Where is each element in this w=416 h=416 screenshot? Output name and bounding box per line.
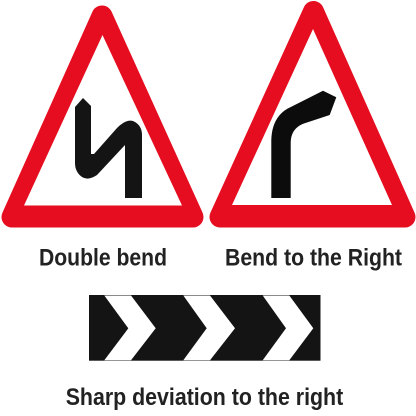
chevron board: sharp deviation: [89, 295, 320, 361]
label: double bend: Double bend: [39, 244, 167, 272]
sign: bend to the right: [220, 12, 405, 217]
label: sharp deviation to the right: Sharp deviation to the right: [66, 384, 343, 411]
sign: double bend: [12, 16, 193, 217]
